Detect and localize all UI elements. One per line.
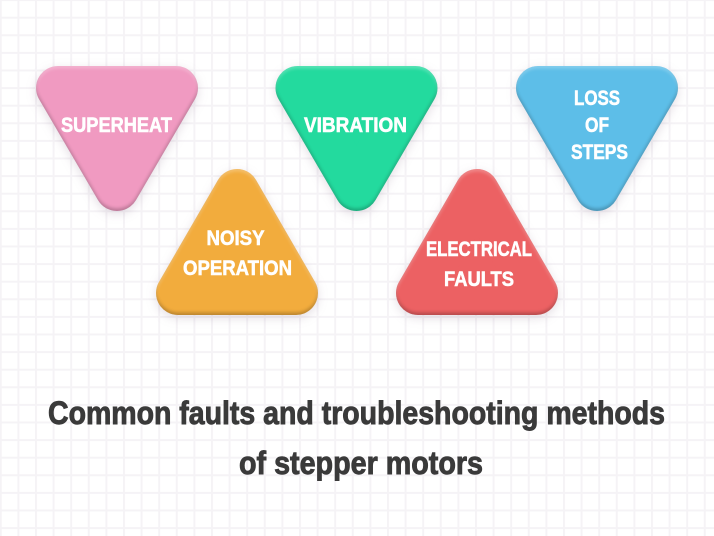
label: electrical faults: ELECTRICAL [426, 237, 532, 261]
label: noisy operation: NOISY [206, 226, 264, 250]
label: loss of steps [571, 86, 628, 164]
label: electrical faults [426, 237, 532, 291]
label: vibration: VIBRATION [304, 113, 407, 137]
panel: electrical faults triangle [418, 191, 536, 293]
panel: noisy operation triangle [178, 191, 296, 293]
panel: superheat triangle [58, 88, 176, 189]
panel: loss of steps triangle [538, 86, 656, 189]
label: loss of steps: STEPS [571, 140, 628, 164]
label: noisy operation: OPERATION [183, 256, 292, 280]
label: electrical faults: FAULTS [444, 267, 514, 291]
label: noisy operation [183, 226, 292, 280]
panel: vibration triangle [298, 88, 416, 189]
title [48, 395, 665, 481]
label: superheat: SUPERHEAT [61, 113, 172, 137]
label: loss of steps: OF [585, 113, 609, 137]
title: of stepper motors [239, 445, 483, 481]
label: loss of steps: LOSS [574, 86, 620, 110]
